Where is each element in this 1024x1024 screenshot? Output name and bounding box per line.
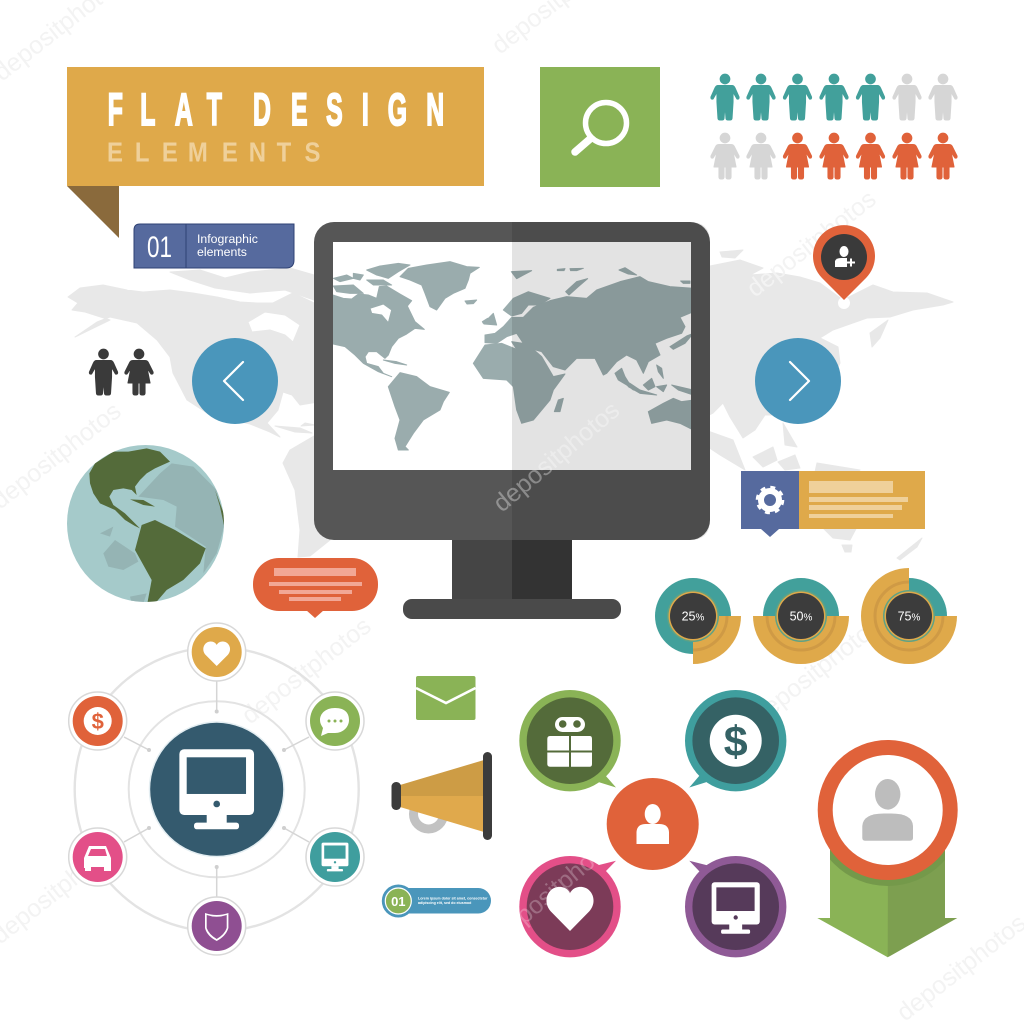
globe <box>67 445 225 603</box>
node: shield <box>188 897 246 955</box>
arrow button: next <box>755 338 841 424</box>
watermarks: depositphotos <box>741 185 881 303</box>
central user circle <box>607 778 699 870</box>
node: heart <box>188 623 246 681</box>
node: monitor <box>306 828 364 886</box>
bubble: monitor <box>685 856 786 957</box>
label: 01 infographic elements: 01 <box>147 231 172 264</box>
hub diagram <box>69 623 364 955</box>
bubble: dollar: $ <box>724 718 748 766</box>
map pin with add-user icon <box>813 225 875 309</box>
donut chart 75% <box>861 568 957 664</box>
banner ribbon tail <box>67 186 119 238</box>
donut chart 25% <box>655 578 741 664</box>
icon: gift box <box>547 717 592 767</box>
user circle <box>825 748 950 872</box>
label: 01 infographic elements: Infographic <box>197 232 258 246</box>
donut chart 25%: 25% <box>682 610 704 624</box>
label pill: 01: Lorem ipsum dolor sit amet, consectetur <box>418 896 488 900</box>
people pictogram rows <box>711 74 957 179</box>
bubble: dollar <box>685 690 786 791</box>
hub rings and connectors <box>75 647 359 931</box>
icon: magnifier <box>575 102 626 152</box>
label pill: 01: adipiscing elit, sed do eiusmod <box>418 901 471 905</box>
label pill: 01: 01 <box>391 894 406 909</box>
arrow button: previous <box>192 338 278 424</box>
title: Flat Design: FLATDESIGN <box>108 84 444 135</box>
node: dollar <box>69 692 127 750</box>
monitor bezel <box>314 222 710 540</box>
background world map <box>68 250 953 560</box>
user pin with green arrow <box>812 734 964 957</box>
settings card <box>741 471 925 537</box>
donut chart 75%: 75% <box>898 610 920 624</box>
bubble: gift <box>519 690 621 791</box>
monitor right-half shading <box>512 222 710 540</box>
icon: envelope <box>416 676 476 720</box>
computer monitor with world map <box>314 222 710 619</box>
label pill: 01 <box>382 884 491 918</box>
speech bubble with text lines <box>253 558 378 618</box>
green arrow <box>818 850 958 958</box>
banner panel <box>67 67 484 186</box>
node: chat <box>306 692 364 750</box>
watermarks: depositphotos <box>746 612 886 730</box>
icon: user silhouette <box>862 779 913 841</box>
globe far-side land <box>100 463 225 603</box>
title banner <box>67 67 484 238</box>
icon: megaphone <box>392 752 492 840</box>
icon: gear <box>757 487 783 513</box>
monitor screen <box>333 242 691 470</box>
world map <box>330 262 693 450</box>
globe near-side land <box>89 448 225 603</box>
node: car <box>69 828 127 886</box>
man and woman icons <box>89 349 153 395</box>
watermarks: depositphotos <box>236 612 376 730</box>
donut chart 50%: 50% <box>790 610 812 624</box>
search tile <box>540 67 660 187</box>
bubble: heart: depositphotos <box>489 826 626 948</box>
computer monitor with world map: depositphotos <box>488 396 625 518</box>
monitor stand <box>403 538 621 619</box>
label: 01 infographic elements <box>134 224 294 268</box>
card text lines <box>809 481 908 518</box>
donut chart 50% <box>753 578 849 664</box>
node: dollar: $ <box>92 709 104 734</box>
subtitle: Elements: ELEMENTS <box>107 138 320 168</box>
hub centre monitor <box>149 721 285 857</box>
label: 01 infographic elements: elements <box>197 245 247 259</box>
